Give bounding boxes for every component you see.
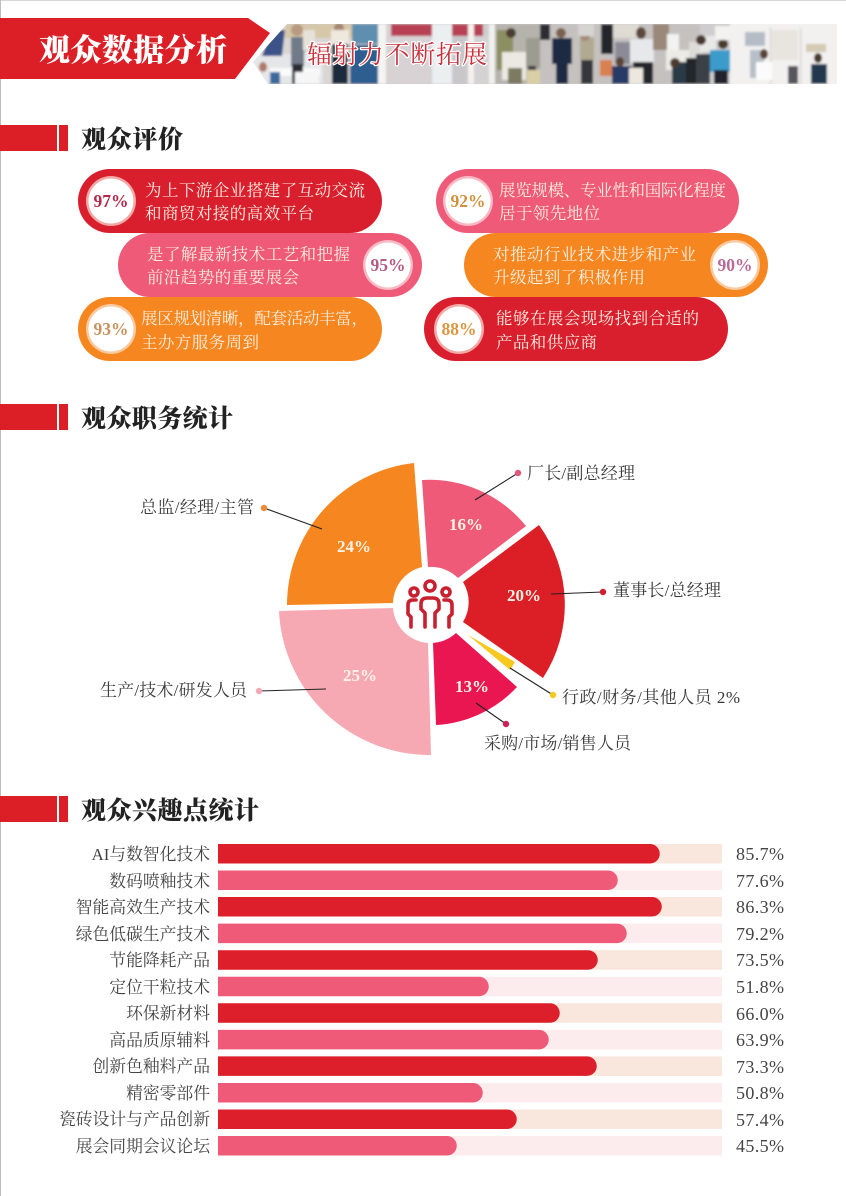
pill 95% xyxy=(118,233,422,297)
row: AI: AI与数智化技术 xyxy=(92,845,210,864)
slice 2% xyxy=(468,635,515,670)
header banner xyxy=(0,18,270,79)
row: forums: 展会同期会议论坛 xyxy=(76,1137,211,1156)
pill 88%: 能够在展会现场找到合适的 xyxy=(496,309,699,328)
pill 90%: 90% xyxy=(718,255,752,275)
label: admin and finance xyxy=(510,668,740,707)
row: energy saving xyxy=(109,950,784,970)
label: production xyxy=(100,681,326,700)
pill 93%: 93% xyxy=(94,319,128,339)
row: tile design: 瓷砖设计与产品创新 xyxy=(59,1110,210,1129)
row: smart production xyxy=(76,897,784,917)
row: forums xyxy=(76,1136,784,1156)
row: forums: 45.5% xyxy=(736,1136,784,1156)
row: raw materials xyxy=(109,1030,784,1050)
pill 97%: 和商贸对接的高效平台 xyxy=(145,204,314,223)
section heading: job roles xyxy=(0,404,233,433)
label: chairman: 董事长/总经理 xyxy=(613,581,721,600)
header photo strip xyxy=(253,24,837,84)
slice 13%: 13% xyxy=(455,677,489,696)
row: dry granule: 定位干粒技术 xyxy=(109,978,210,997)
row: precision parts xyxy=(126,1083,784,1103)
row: eco materials: 66.0% xyxy=(736,1004,784,1024)
row: green production xyxy=(76,924,784,944)
pill 97%: 为上下游企业搭建了互动交流 xyxy=(145,181,365,200)
main title: 观众数据分析 xyxy=(39,33,227,68)
section heading: audience evaluation: 观众评价 xyxy=(81,126,183,154)
row: colour glaze: 73.3% xyxy=(736,1057,784,1077)
pill 90%: 升级起到了积极作用 xyxy=(493,268,645,287)
label: procurement: 采购/市场/销售人员 xyxy=(484,734,633,753)
row: green production: 79.2% xyxy=(736,924,784,944)
pill 92%: 居于领先地位 xyxy=(499,204,600,223)
slice 25%: 25% xyxy=(343,666,377,685)
panel: evaluation pills xyxy=(78,169,768,361)
section heading: interests: 观众兴趣点统计 xyxy=(81,796,259,825)
row: colour glaze: 创新色釉料产品 xyxy=(93,1057,210,1076)
label: factory director: 厂长/副总经理 xyxy=(527,464,635,483)
section heading: audience evaluation xyxy=(0,125,183,154)
pill 97% xyxy=(78,169,382,233)
row: eco materials xyxy=(126,1003,784,1024)
label: admin and finance: 行政/财务/其他人员 2% xyxy=(562,687,740,707)
row: energy saving: 节能降耗产品 xyxy=(109,951,210,970)
row: raw materials: 高品质原辅料 xyxy=(109,1031,210,1050)
section heading: interests xyxy=(0,796,259,825)
slice 20%: 20% xyxy=(507,586,541,605)
slice 13% xyxy=(433,633,517,725)
row: precision parts: 50.8% xyxy=(736,1083,784,1103)
pill 90% xyxy=(464,233,768,297)
label: managers: 总监/经理/主管 xyxy=(140,498,254,517)
row: digital glaze: 77.6% xyxy=(736,871,784,891)
row: precision parts: 精密零部件 xyxy=(126,1084,210,1103)
label: procurement xyxy=(476,703,633,753)
row: colour glaze xyxy=(93,1056,784,1077)
section heading: job roles: 观众职务统计 xyxy=(81,405,233,433)
photo strip caption: 辐射力不断拓展 xyxy=(307,41,487,69)
pill 95%: 95% xyxy=(370,255,406,275)
pill 92%: 展览规模、专业性和国际化程度 xyxy=(499,181,726,200)
slice 20% xyxy=(463,525,565,678)
pill 93% xyxy=(78,297,382,361)
row: eco materials: 环保新材料 xyxy=(126,1004,210,1023)
pill 93%: 主办方服务周到 xyxy=(141,333,259,352)
slice 16%: 16% xyxy=(449,515,483,534)
row: dry granule xyxy=(109,977,784,997)
row: smart production: 86.3% xyxy=(736,897,784,917)
row: AI: 85.7% xyxy=(736,844,784,864)
row: green production: 绿色低碳生产技术 xyxy=(76,925,210,944)
row: smart production: 智能高效生产技术 xyxy=(76,898,210,917)
slice 24% xyxy=(287,463,422,605)
pill 97%: 97% xyxy=(94,191,128,211)
pill 93%: 展区规划清晰，配套活动丰富， xyxy=(141,308,368,328)
label: factory director xyxy=(475,464,635,500)
pill 95%: 前沿趋势的重要展会 xyxy=(147,268,299,287)
pill 88%: 产品和供应商 xyxy=(496,333,597,352)
pill 92% xyxy=(436,169,739,233)
pie chart: job roles xyxy=(279,463,565,755)
row: tile design xyxy=(59,1110,784,1130)
bar chart: interests xyxy=(59,844,784,1156)
slice 24%: 24% xyxy=(337,537,371,556)
row: raw materials: 63.9% xyxy=(736,1030,784,1050)
row: digital glaze: 数码喷釉技术 xyxy=(109,872,210,891)
slice 25% xyxy=(279,608,431,755)
pill 90%: 对推动行业技术进步和产业 xyxy=(493,245,696,264)
pill 95%: 是了解最新技术工艺和把握 xyxy=(147,245,350,264)
row: dry granule: 51.8% xyxy=(736,977,784,997)
pill 92%: 92% xyxy=(450,191,486,211)
pill 88% xyxy=(424,297,728,361)
label: chairman xyxy=(551,581,721,600)
row: AI xyxy=(92,844,784,864)
label: production: 生产/技术/研发人员 xyxy=(100,681,249,700)
row: tile design: 57.4% xyxy=(736,1110,784,1130)
label: managers xyxy=(140,498,322,529)
pill 88%: 88% xyxy=(442,319,476,339)
row: energy saving: 73.5% xyxy=(736,950,784,970)
icon: audience people xyxy=(408,581,452,627)
slice 16% xyxy=(422,480,526,578)
row: digital glaze xyxy=(109,870,784,891)
